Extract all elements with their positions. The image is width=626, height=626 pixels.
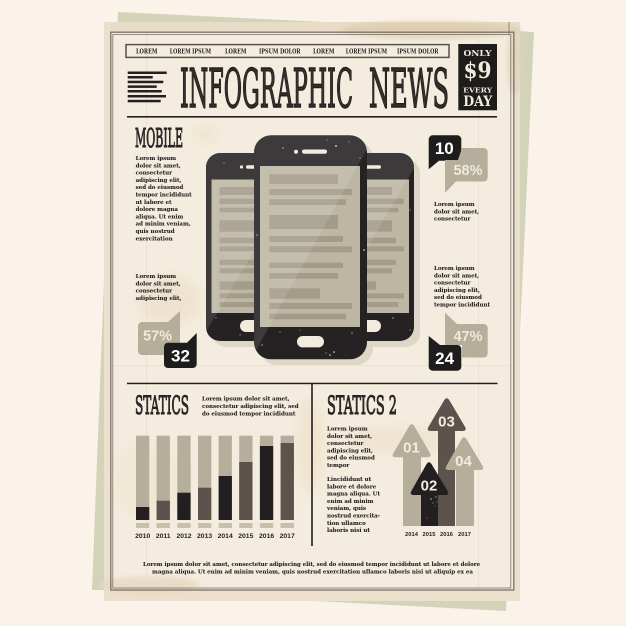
heading: statics 2: STATICS 2 [327,391,397,420]
bar chart: 2017 [280,533,295,540]
bar chart: 2011 [156,533,171,540]
text block: right lower: sed do eiusmod [434,295,482,301]
bar chart: 2016 [259,533,274,540]
text block: statics 2 second paragraph: magna aliqua. Ut [327,492,380,498]
text: STATICS [135,391,189,420]
top navigation strip: IPSUM DOLOR [397,48,439,55]
text block: left lower: Lorem ipsum [136,274,176,280]
text block: right upper: dolor sit amet, [434,209,479,215]
text block: statics 2 first paragraph: tempor [327,463,349,469]
text block: footer: magna aliqua. Ut enim ad minim veniam, quis nostrud exercitation ullamco laboris nisi ut aliquip ex ea [152,569,473,575]
header rule [127,116,497,118]
arrow year labels [405,532,471,538]
text block: right lower: tempor incididunt [434,302,490,308]
text block: mobile intro: dolor sit amet, [136,163,181,169]
bar chart: 2014 [218,533,233,540]
bar chart: 2015 [238,533,254,540]
callout: 47%: 47% [453,329,483,345]
section dividers [127,383,498,546]
text block: statics 2 first paragraph: Lorem ipsum [327,426,368,432]
text block: statics 2 second paragraph: labore et dolore [327,484,377,490]
text block: statics intro: consectetur adipiscing elit, sed [202,404,299,410]
bar chart: 2010 [135,533,150,540]
text block: mobile intro: aliqua. Ut enim [136,214,183,220]
arrow 03: 03 [438,414,455,430]
price box: EVERY [463,86,492,94]
price box: DAY [463,94,493,110]
text block: statics 2 first paragraph: dolor sit amet, [327,434,372,440]
icon: headline text lines [128,72,167,102]
top navigation strip: LOREM [225,48,247,55]
text block: left lower: dolor sit amet, [136,281,181,287]
text block: mobile intro: ut labore et [136,200,172,206]
text: NEWS [369,57,449,120]
callout: 57% [138,311,180,355]
bar chart [135,436,295,540]
page frame double border [111,32,514,590]
callout: 24: 24 [435,349,455,368]
text block: right lower: Lorem ipsum [434,266,475,272]
price box: ONLY [464,48,492,58]
callout: 32 [164,333,197,368]
price box [458,44,497,110]
text block: right lower: dolor sit amet, [434,273,479,279]
top navigation strip: LOREM IPSUM [170,48,211,55]
phone shadow [212,141,420,365]
text block: statics 2 second paragraph: nostrud exercita- [327,514,380,520]
text block: mobile intro: consectetur [136,171,172,177]
callout: 10: 10 [435,139,454,158]
text block: mobile intro: ad minim veniam, [136,222,191,228]
text block: left lower: adipiscing elit, [136,296,182,302]
text block: statics 2 first paragraph: consectetur [327,441,364,447]
price box: $9 [464,58,492,84]
text block: right upper: consectetur [434,217,471,223]
text block: mobile intro: adipiscing elit, [136,178,182,184]
bar chart: 2013 [197,533,212,540]
phones illustration [204,135,420,365]
text block: mobile intro: tempor incididunt [136,192,192,198]
text block: footer: Lorem ipsum dolor sit amet, consectetur adipiscing elit, sed do eiusmod tempor incididunt ut labore et dolore [143,562,481,568]
callout: 24 [429,336,461,371]
newspaper page [100,21,523,601]
text block: statics intro: Lorem ipsum dolor sit amet, [202,396,290,402]
arrow 02: 02 [421,478,437,494]
phone: center [254,135,369,359]
title: INFOGRAPHIC [180,57,353,120]
text block: left lower: consectetur [136,289,172,295]
phone: right [367,153,414,341]
text block: statics 2 second paragraph: laboris nisi ut [327,528,370,534]
phone grunge specks [216,140,410,356]
callout: 32: 32 [171,346,190,366]
text block: mobile intro: quis nostrud [136,229,175,235]
callout: 47% [445,313,488,358]
arrow year labels: 2014 [405,532,419,538]
text block: right lower: consectetur [434,281,471,287]
arrow year labels: 2017 [458,532,471,538]
top navigation strip: LOREM [136,48,158,55]
text block: statics 2 first paragraph: adipiscing elit, [327,448,373,454]
text block: statics 2 second paragraph: veniam, quis [326,506,366,512]
top navigation strip: IPSUM DOLOR [259,48,301,55]
arrow 04: 04 [455,453,472,470]
arrow year labels: 2016 [440,532,454,538]
arrow 01: 01 [403,440,420,456]
arrow year labels: 2015 [423,532,436,538]
text block: right lower: adipiscing elit, [434,288,480,294]
title [180,57,449,120]
text block: statics 2 second paragraph: tion ullamco [327,521,366,527]
text block: right upper: Lorem ipsum [434,202,475,208]
top navigation strip: LOREM IPSUM [346,48,387,55]
callout: 57%: 57% [143,328,172,344]
text block: mobile intro: dolore magna [136,207,178,213]
text block: mobile intro: exercitation [136,236,173,242]
text block: statics 2 second paragraph: enim ad minim [327,499,374,505]
phone: left [206,153,254,341]
callout: 58% [445,148,488,193]
arrow chart [393,398,483,538]
text block: mobile intro: sed do eiusmod [136,185,184,191]
text block: statics intro: do eiusmod tempor incididunt [202,412,296,418]
text block: statics 2 first paragraph: sed do eiusmod [327,456,375,462]
top navigation strip [126,45,449,57]
callout: 58%: 58% [453,163,483,179]
callout: 10 [429,135,461,169]
text: MOBILE [135,124,183,154]
bar chart: 2012 [176,533,192,540]
top navigation strip: LOREM [313,48,335,55]
text block: mobile intro: Lorem ipsum [136,156,176,162]
back sheet of paper [92,12,534,611]
text block: statics 2 second paragraph: Lincididunt ut [327,477,372,483]
